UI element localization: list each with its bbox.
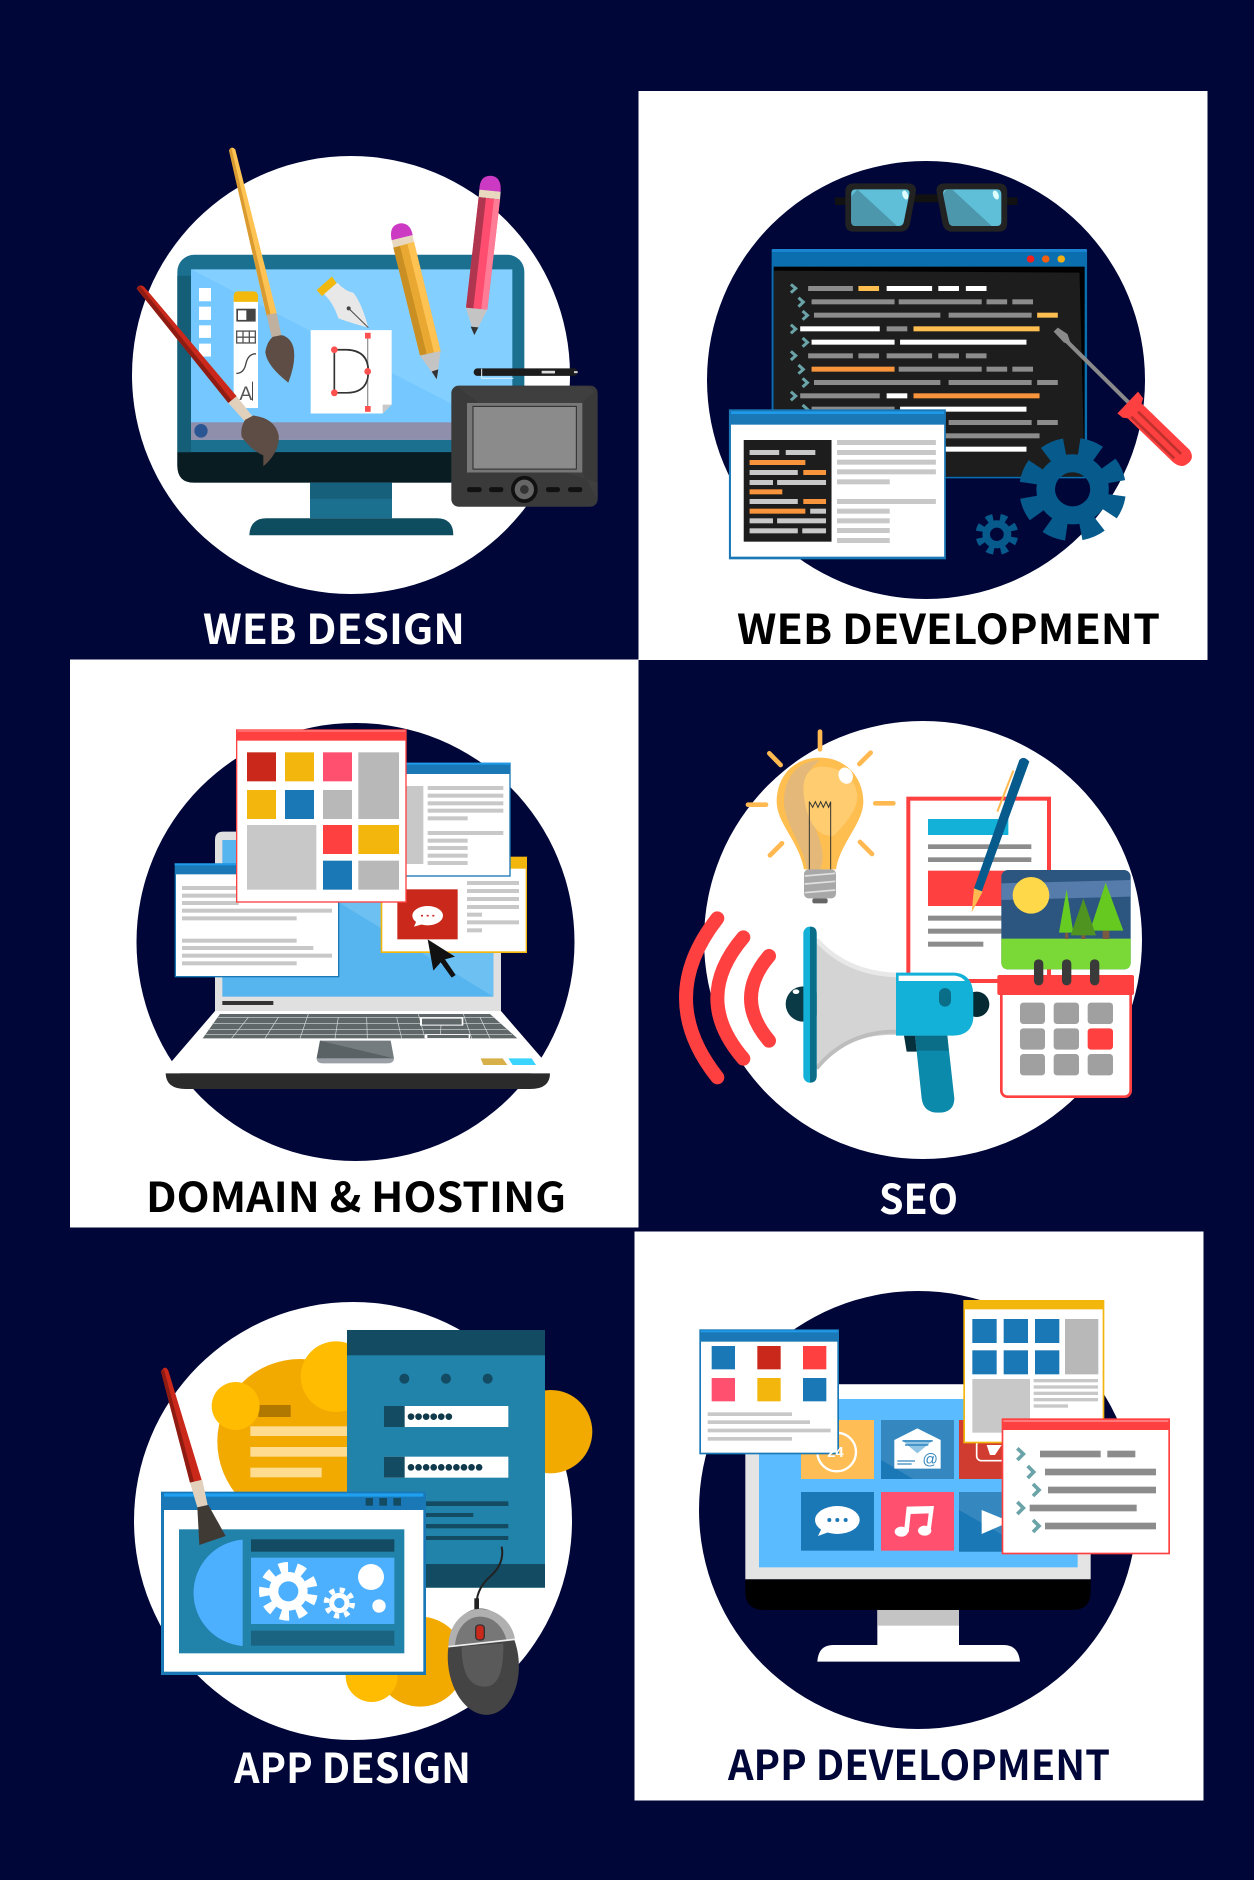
red code window — [1002, 1418, 1170, 1554]
heading: web development: WEB DEVELOPMENT — [737, 596, 1160, 656]
panel: domain and hosting — [70, 660, 638, 1228]
icon: calendar — [997, 959, 1134, 1097]
small browser window — [729, 409, 946, 559]
panel: app design — [134, 1302, 592, 1795]
red tile window — [236, 729, 407, 903]
icon: graphics tablet — [451, 386, 598, 507]
panel: seo — [686, 721, 1142, 1226]
icon: fountain pen nib — [317, 276, 368, 328]
icon: landscape photo — [1001, 870, 1131, 969]
panel background — [70, 660, 638, 1228]
login screen panel — [347, 1330, 545, 1588]
panel: web design — [132, 148, 598, 656]
icon: desktop monitor with app tiles — [745, 1384, 1091, 1662]
code editor window — [772, 249, 1087, 478]
heading: seo: SEO — [879, 1166, 958, 1226]
illustration: seo — [686, 732, 1134, 1113]
illustration: app development — [699, 1300, 1170, 1662]
icon: cursor arrow — [428, 939, 456, 978]
back right window — [393, 763, 511, 877]
yellow tile window — [963, 1300, 1104, 1443]
icon: desktop monitor — [177, 255, 524, 535]
icon: document with pen — [908, 758, 1049, 981]
icon: laptop — [166, 832, 551, 1089]
circle: web development backdrop — [707, 161, 1145, 599]
icon: screwdriver — [1054, 328, 1192, 466]
clock digits: 24 — [827, 1445, 844, 1461]
circle: seo backdrop — [704, 721, 1142, 1159]
icon: stylus — [477, 369, 578, 378]
icon: artboard with letter D — [311, 330, 392, 413]
heading: app design: APP DESIGN — [233, 1735, 471, 1795]
heading: web design: WEB DESIGN — [203, 596, 465, 656]
yellow chat window — [381, 857, 527, 953]
icon: sound waves — [686, 918, 769, 1077]
illustration: app design — [161, 1330, 592, 1718]
icon: paint brush — [161, 1368, 226, 1545]
left text window — [175, 863, 339, 977]
icon: glasses — [835, 183, 1018, 232]
circle: app design backdrop — [134, 1302, 572, 1740]
icon: red paint brush — [137, 285, 279, 466]
icon: megaphone — [786, 927, 989, 1113]
heading: app development: APP DEVELOPMENT — [727, 1732, 1110, 1792]
icon: large gear — [1023, 442, 1122, 537]
illustration: web development — [729, 183, 1192, 559]
icon: tool palette: A — [239, 383, 252, 405]
circle: web design backdrop — [132, 156, 570, 594]
illustration: domain and hosting — [166, 729, 551, 1089]
app design window — [161, 1492, 426, 1675]
orange bubbles — [212, 1341, 592, 1707]
circle: app development backdrop — [699, 1291, 1137, 1729]
icon: orange pencil — [391, 223, 441, 379]
panel background — [634, 1232, 1204, 1800]
icon: small gear — [977, 515, 1017, 554]
icon: pink pencil — [466, 176, 501, 335]
icon: computer mouse — [443, 1547, 524, 1718]
left tile window — [699, 1329, 839, 1454]
panel background — [638, 91, 1208, 660]
heading: domain and hosting: DOMAIN & HOSTING — [146, 1164, 566, 1224]
panel: web development — [638, 91, 1208, 660]
illustration: web design — [137, 148, 598, 535]
icon: light bulb — [748, 732, 893, 903]
icon: tool palette — [234, 291, 258, 408]
icon: desktop monitor with app tiles: @ — [922, 1451, 938, 1468]
circle: domain backdrop — [136, 723, 574, 1161]
panel: app development — [634, 1232, 1204, 1800]
icon: yellow paint brush — [229, 148, 294, 383]
